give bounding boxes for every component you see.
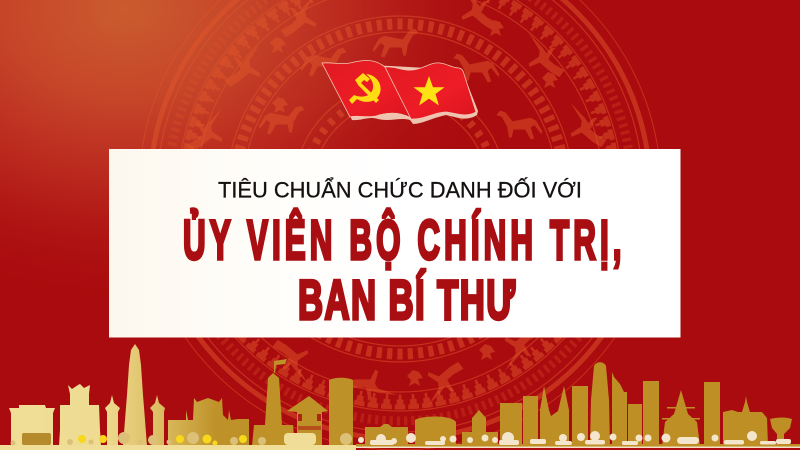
cream trees and cars <box>358 431 791 445</box>
skyline right: Ho Chi Minh landmarks <box>400 362 792 446</box>
bronze drum pattern <box>139 0 661 450</box>
city skyline <box>0 344 800 450</box>
party flag <box>322 60 411 118</box>
main title <box>183 207 621 331</box>
title panel <box>109 149 680 338</box>
drum birds and animals <box>187 0 606 418</box>
flags emblem <box>322 60 478 124</box>
main title: ỦY VIÊN BỘ CHÍNH TRỊ, <box>183 207 621 271</box>
subtitle: TIÊU CHUẨN CHỨC DANH ĐỐI VỚI <box>218 176 582 202</box>
hammer and sickle <box>349 73 381 104</box>
main title: BAN BÍ THƯ <box>298 269 515 331</box>
ground strip left <box>0 445 356 450</box>
pavilion windows <box>298 414 321 430</box>
yellow trees <box>78 434 247 446</box>
skyline left: Ha Noi landmarks <box>9 344 408 446</box>
flag shadow edge <box>322 63 478 124</box>
national flag <box>385 63 476 119</box>
ground strip right <box>356 444 800 448</box>
bus <box>284 433 316 445</box>
truck <box>22 433 51 445</box>
pale and gold shrubs <box>10 432 352 446</box>
star <box>414 76 444 106</box>
